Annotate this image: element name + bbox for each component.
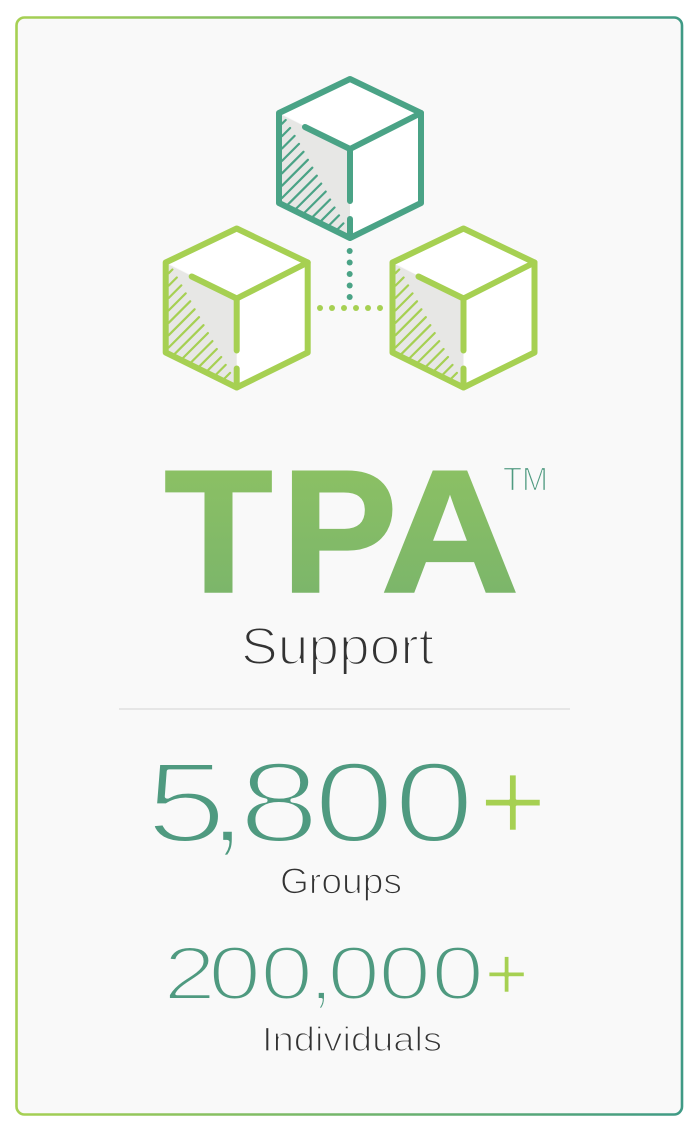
trademark: TM bbox=[503, 460, 548, 498]
title: TPA bbox=[164, 434, 519, 628]
icon: left green cube bbox=[166, 228, 308, 388]
icon: right green cube bbox=[392, 228, 534, 388]
icon: dotted connector horizontal bbox=[317, 305, 383, 311]
stat: groups bbox=[146, 736, 547, 902]
title: TPA: T bbox=[164, 434, 272, 628]
number: 5,800: 5,800 bbox=[146, 738, 475, 866]
icon: three connected cubes bbox=[166, 79, 534, 388]
label: Groups: Groups bbox=[280, 860, 402, 902]
label: Individuals: Individuals bbox=[262, 1021, 442, 1059]
stat: individuals bbox=[163, 931, 528, 1059]
icon: top teal cube bbox=[279, 79, 421, 238]
plus sign: + bbox=[485, 932, 528, 1015]
title: TPA: P bbox=[282, 434, 397, 628]
divider bbox=[119, 708, 570, 710]
number: 200,000: 200,000 bbox=[163, 931, 484, 1016]
plus sign: + bbox=[479, 736, 547, 866]
subtitle: Support: Support bbox=[241, 618, 435, 676]
title: TPA: A bbox=[381, 434, 519, 628]
icon: dotted connector vertical bbox=[347, 248, 353, 300]
